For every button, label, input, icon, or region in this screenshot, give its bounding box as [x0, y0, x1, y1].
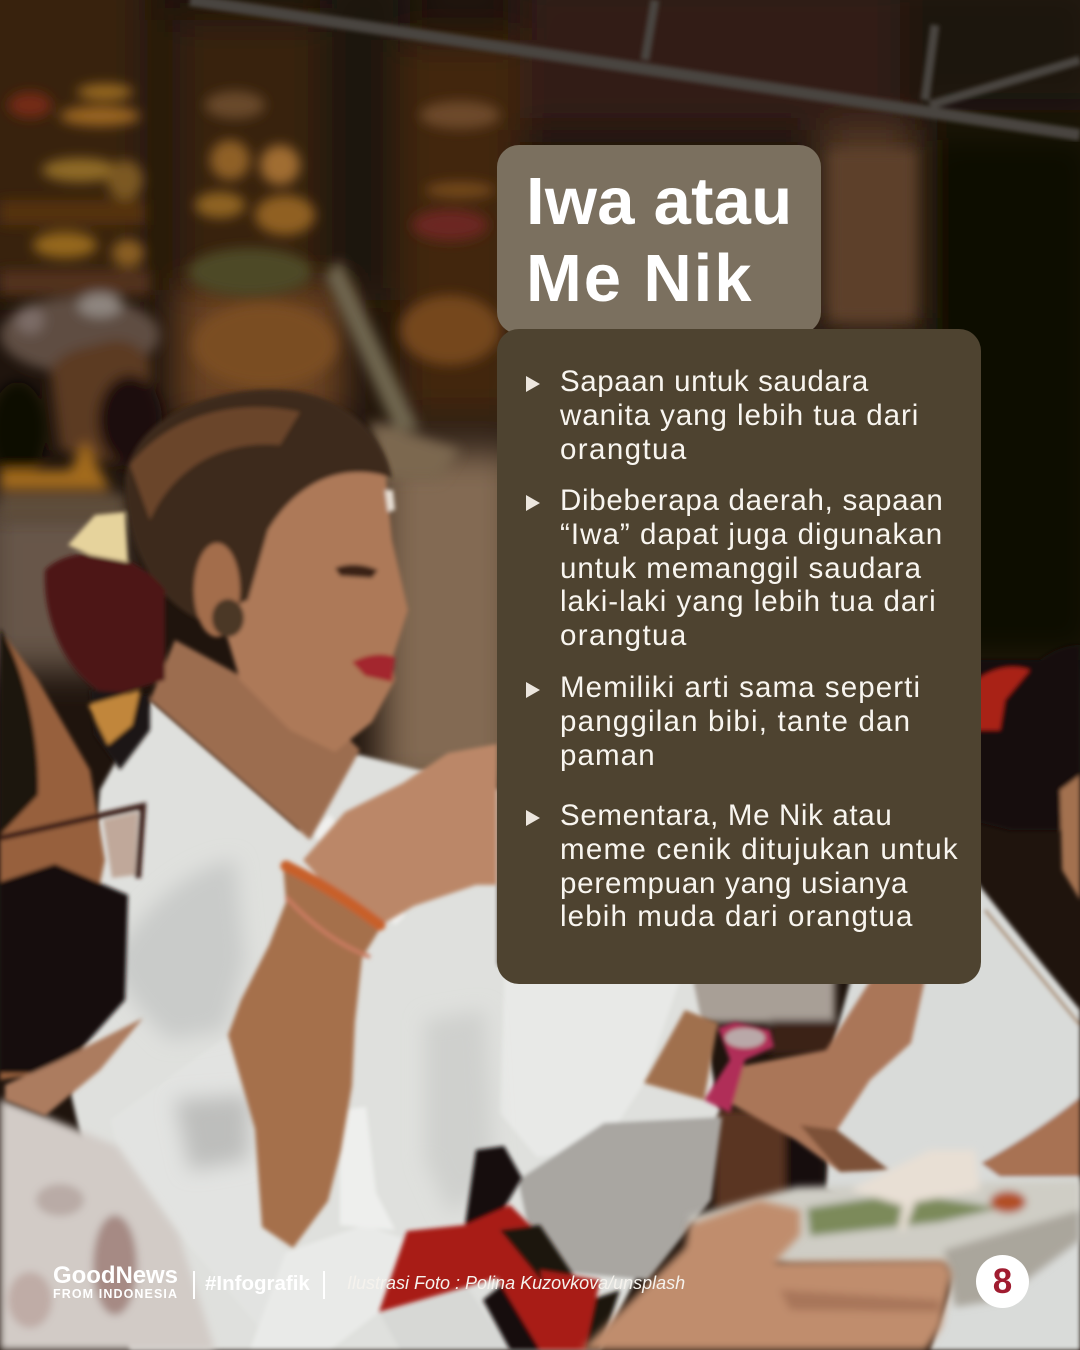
arm, hand and bracelets — [228, 744, 497, 1248]
right woman — [826, 645, 1080, 1350]
bullet 2: “Iwa” dapat juga digunakan — [560, 518, 943, 551]
bullet 2 — [526, 484, 944, 652]
title box — [497, 145, 821, 334]
bullet 1: Sapaan untuk saudara — [560, 365, 869, 398]
bullet 4: Sementara, Me Nik atau — [560, 799, 892, 832]
bullet 4: lebih muda dari orangtua — [560, 900, 913, 933]
bullet 4: perempuan yang usianya — [560, 867, 908, 900]
front hand — [581, 1200, 952, 1350]
footer brand logo: FROM INDONESIA — [53, 1287, 178, 1301]
footer brand logo — [53, 1262, 178, 1301]
left masked woman — [0, 628, 143, 1116]
photo credit: Ilustrasi Foto : Polina Kuzovkova/unsplash — [347, 1273, 685, 1293]
page number badge — [976, 1255, 1029, 1308]
footer divider left — [193, 1271, 195, 1299]
footer tag: #Infografik — [205, 1272, 310, 1295]
body panel — [497, 329, 981, 984]
right arm, watch and hand — [644, 975, 926, 1172]
background figures lower right — [660, 965, 840, 1210]
lace garment left — [0, 1099, 215, 1350]
title: Iwa atau — [526, 164, 792, 239]
title — [526, 164, 792, 316]
bullet 3: Memiliki arti sama seperti — [560, 671, 921, 704]
kebaya fold shading — [110, 860, 495, 1215]
bullet 4: meme cenik ditujukan untuk — [560, 833, 959, 866]
head and neck — [45, 390, 408, 840]
beam lines — [190, 0, 1080, 135]
bullet 2: untuk memanggil saudara — [560, 552, 922, 585]
sash — [379, 1146, 620, 1350]
bullet 3: paman — [560, 739, 656, 772]
plate of offerings — [689, 1150, 1080, 1307]
soft background masses — [0, 0, 1080, 790]
bullet 2: laki-laki yang lebih tua dari — [560, 585, 937, 618]
bullet 3 — [526, 671, 921, 772]
shelves of offerings — [0, 84, 915, 520]
bullet 3: panggilan bibi, tante dan — [560, 705, 911, 738]
white kebaya — [70, 700, 722, 1350]
page number badge: 8 — [993, 1262, 1012, 1301]
bullet 1 — [526, 365, 919, 466]
bullet 2: orangtua — [560, 619, 688, 652]
footer brand logo: GoodNews — [53, 1262, 178, 1289]
footer divider right — [323, 1271, 325, 1299]
bullet 2: Dibeberapa daerah, sapaan — [560, 484, 944, 517]
bullet 1: orangtua — [560, 433, 688, 466]
bullet 1: wanita yang lebih tua dari — [560, 399, 919, 432]
title: Me Nik — [526, 241, 753, 316]
bullet 4 — [526, 799, 959, 933]
